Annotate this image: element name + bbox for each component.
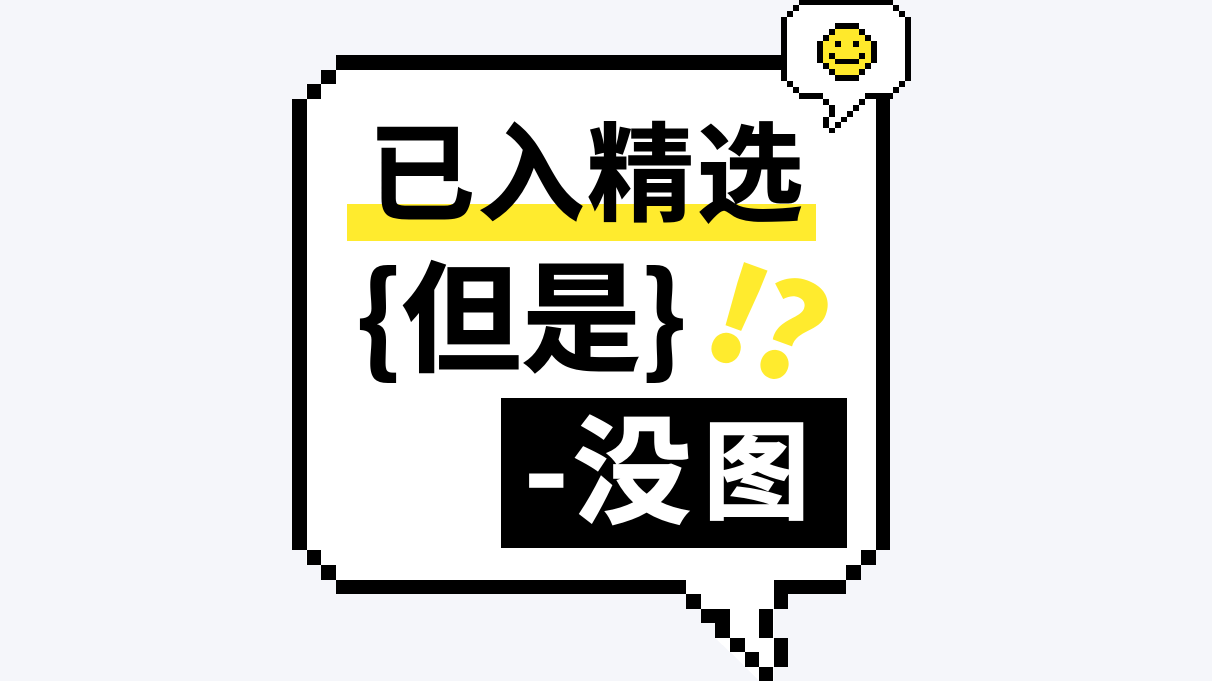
icon: yellow exclamation and question marks: ?: [725, 222, 857, 426]
black label box with 没图: [501, 376, 847, 550]
text: {但是}: {但是}: [356, 223, 687, 397]
icon: small smiley speech bubble: [781, 0, 911, 133]
panel: large pixel speech bubble: [292, 55, 890, 681]
black label box with 没图: 没: [573, 377, 691, 548]
heading: 已入精选: 已入精选: [368, 88, 806, 243]
icon: smiley face: [817, 23, 877, 81]
yellow highlight bar: [347, 204, 816, 241]
black label box with 没图: 图: [703, 386, 810, 541]
black label box with 没图: -: [524, 376, 568, 550]
icon: yellow exclamation and question marks: !: [685, 212, 796, 403]
